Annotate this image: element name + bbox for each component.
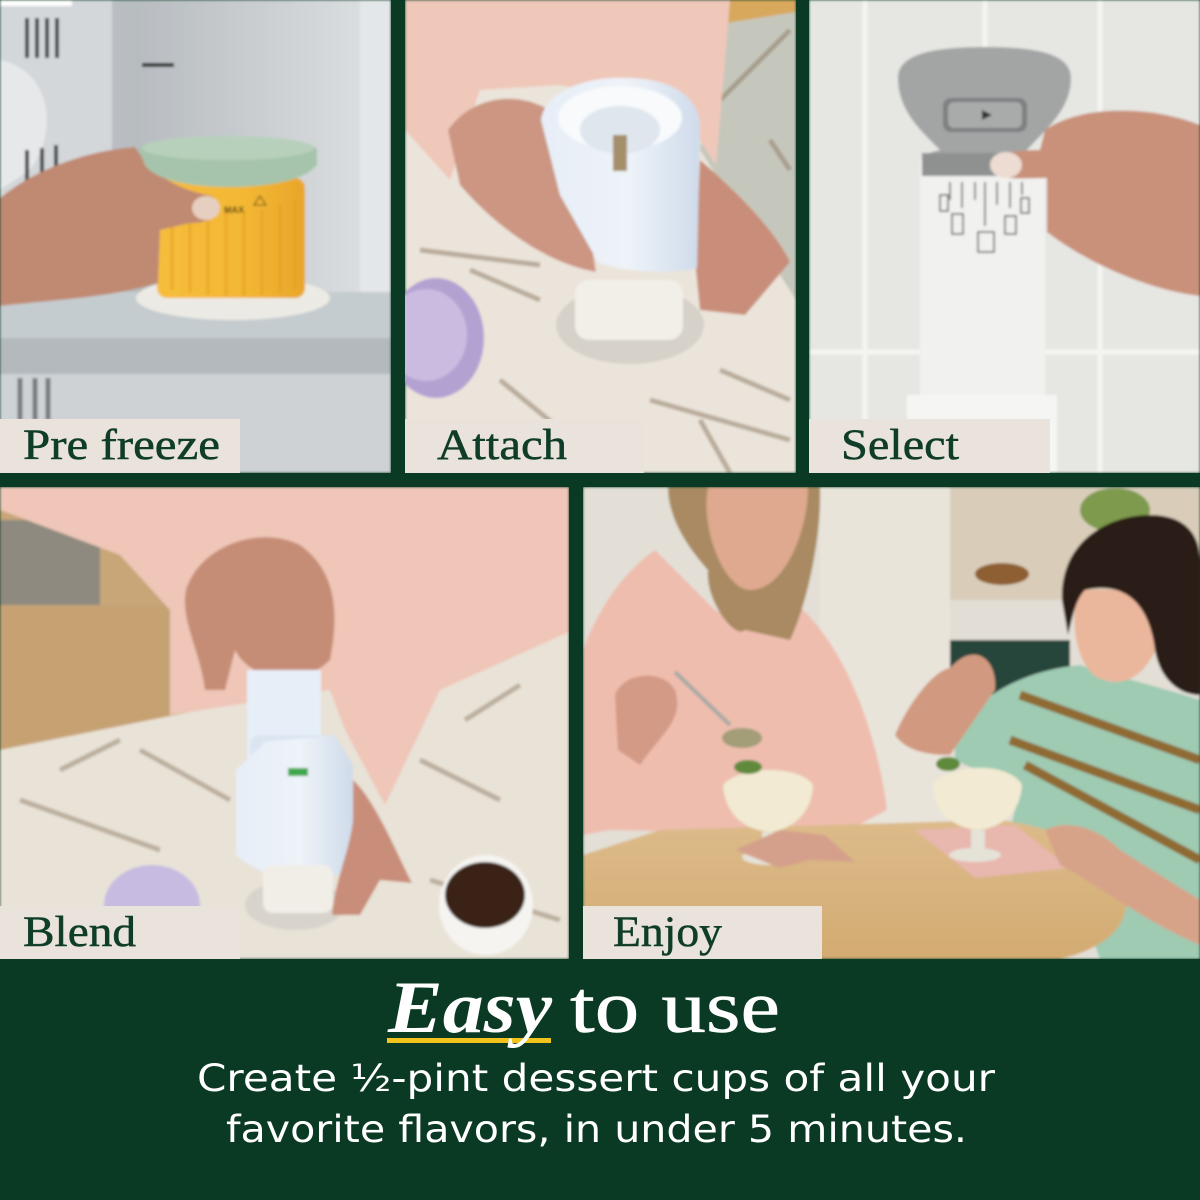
gray dial cap	[898, 47, 1071, 176]
boy's hand on table	[1045, 825, 1200, 945]
cup lid	[139, 136, 317, 187]
blender	[236, 670, 353, 930]
label: attach	[405, 419, 644, 473]
base plate	[135, 284, 331, 321]
lilac lid	[405, 277, 486, 399]
pink sleeve	[405, 0, 730, 180]
boy	[895, 515, 1200, 959]
woman's hand at cup	[735, 830, 855, 868]
body text	[197, 1057, 996, 1151]
hand on dial	[185, 537, 335, 690]
hand on counter	[332, 780, 412, 915]
label: select: Select	[841, 422, 959, 469]
label: enjoy: Enjoy	[613, 909, 723, 956]
body text: Create ½-pint dessert cups of all your	[197, 1057, 996, 1100]
hand	[0, 147, 218, 306]
marble counter	[0, 632, 569, 959]
hands	[448, 99, 596, 272]
panel: attach	[385, 0, 796, 473]
headline underline	[387, 1038, 551, 1043]
napkin	[915, 825, 1070, 878]
clear base and cup	[556, 280, 704, 364]
pictogram icons	[940, 182, 1029, 252]
label: select	[809, 419, 1050, 473]
frozen fruit cup: MAX	[224, 205, 244, 215]
panel: enjoy	[583, 487, 1200, 959]
spoon	[675, 672, 730, 725]
kitchen background	[950, 487, 1200, 695]
headline: Easy	[387, 967, 553, 1049]
panel: select	[809, 0, 1200, 473]
label: pre freeze	[0, 419, 240, 473]
panel: pre freeze	[0, 0, 391, 473]
blender head	[541, 78, 700, 272]
headline: to use	[570, 967, 780, 1049]
body text: favorite flavors, in under 5 minutes.	[226, 1108, 967, 1151]
table	[583, 820, 1126, 959]
lilac lid	[103, 864, 201, 906]
dessert cups	[723, 757, 1022, 865]
label: attach: Attach	[437, 422, 567, 469]
label: blend	[0, 906, 240, 959]
hand	[990, 111, 1200, 296]
woman	[583, 487, 887, 835]
panel: blend	[0, 487, 569, 959]
label: enjoy	[583, 906, 822, 959]
label: blend: Blend	[23, 909, 136, 956]
chocolate ramekin	[439, 855, 533, 955]
frozen fruit cup	[157, 178, 305, 298]
pink shirt	[0, 487, 569, 805]
label: pre freeze: Pre freeze	[23, 422, 220, 469]
headline	[387, 967, 780, 1049]
device body	[907, 160, 1057, 473]
